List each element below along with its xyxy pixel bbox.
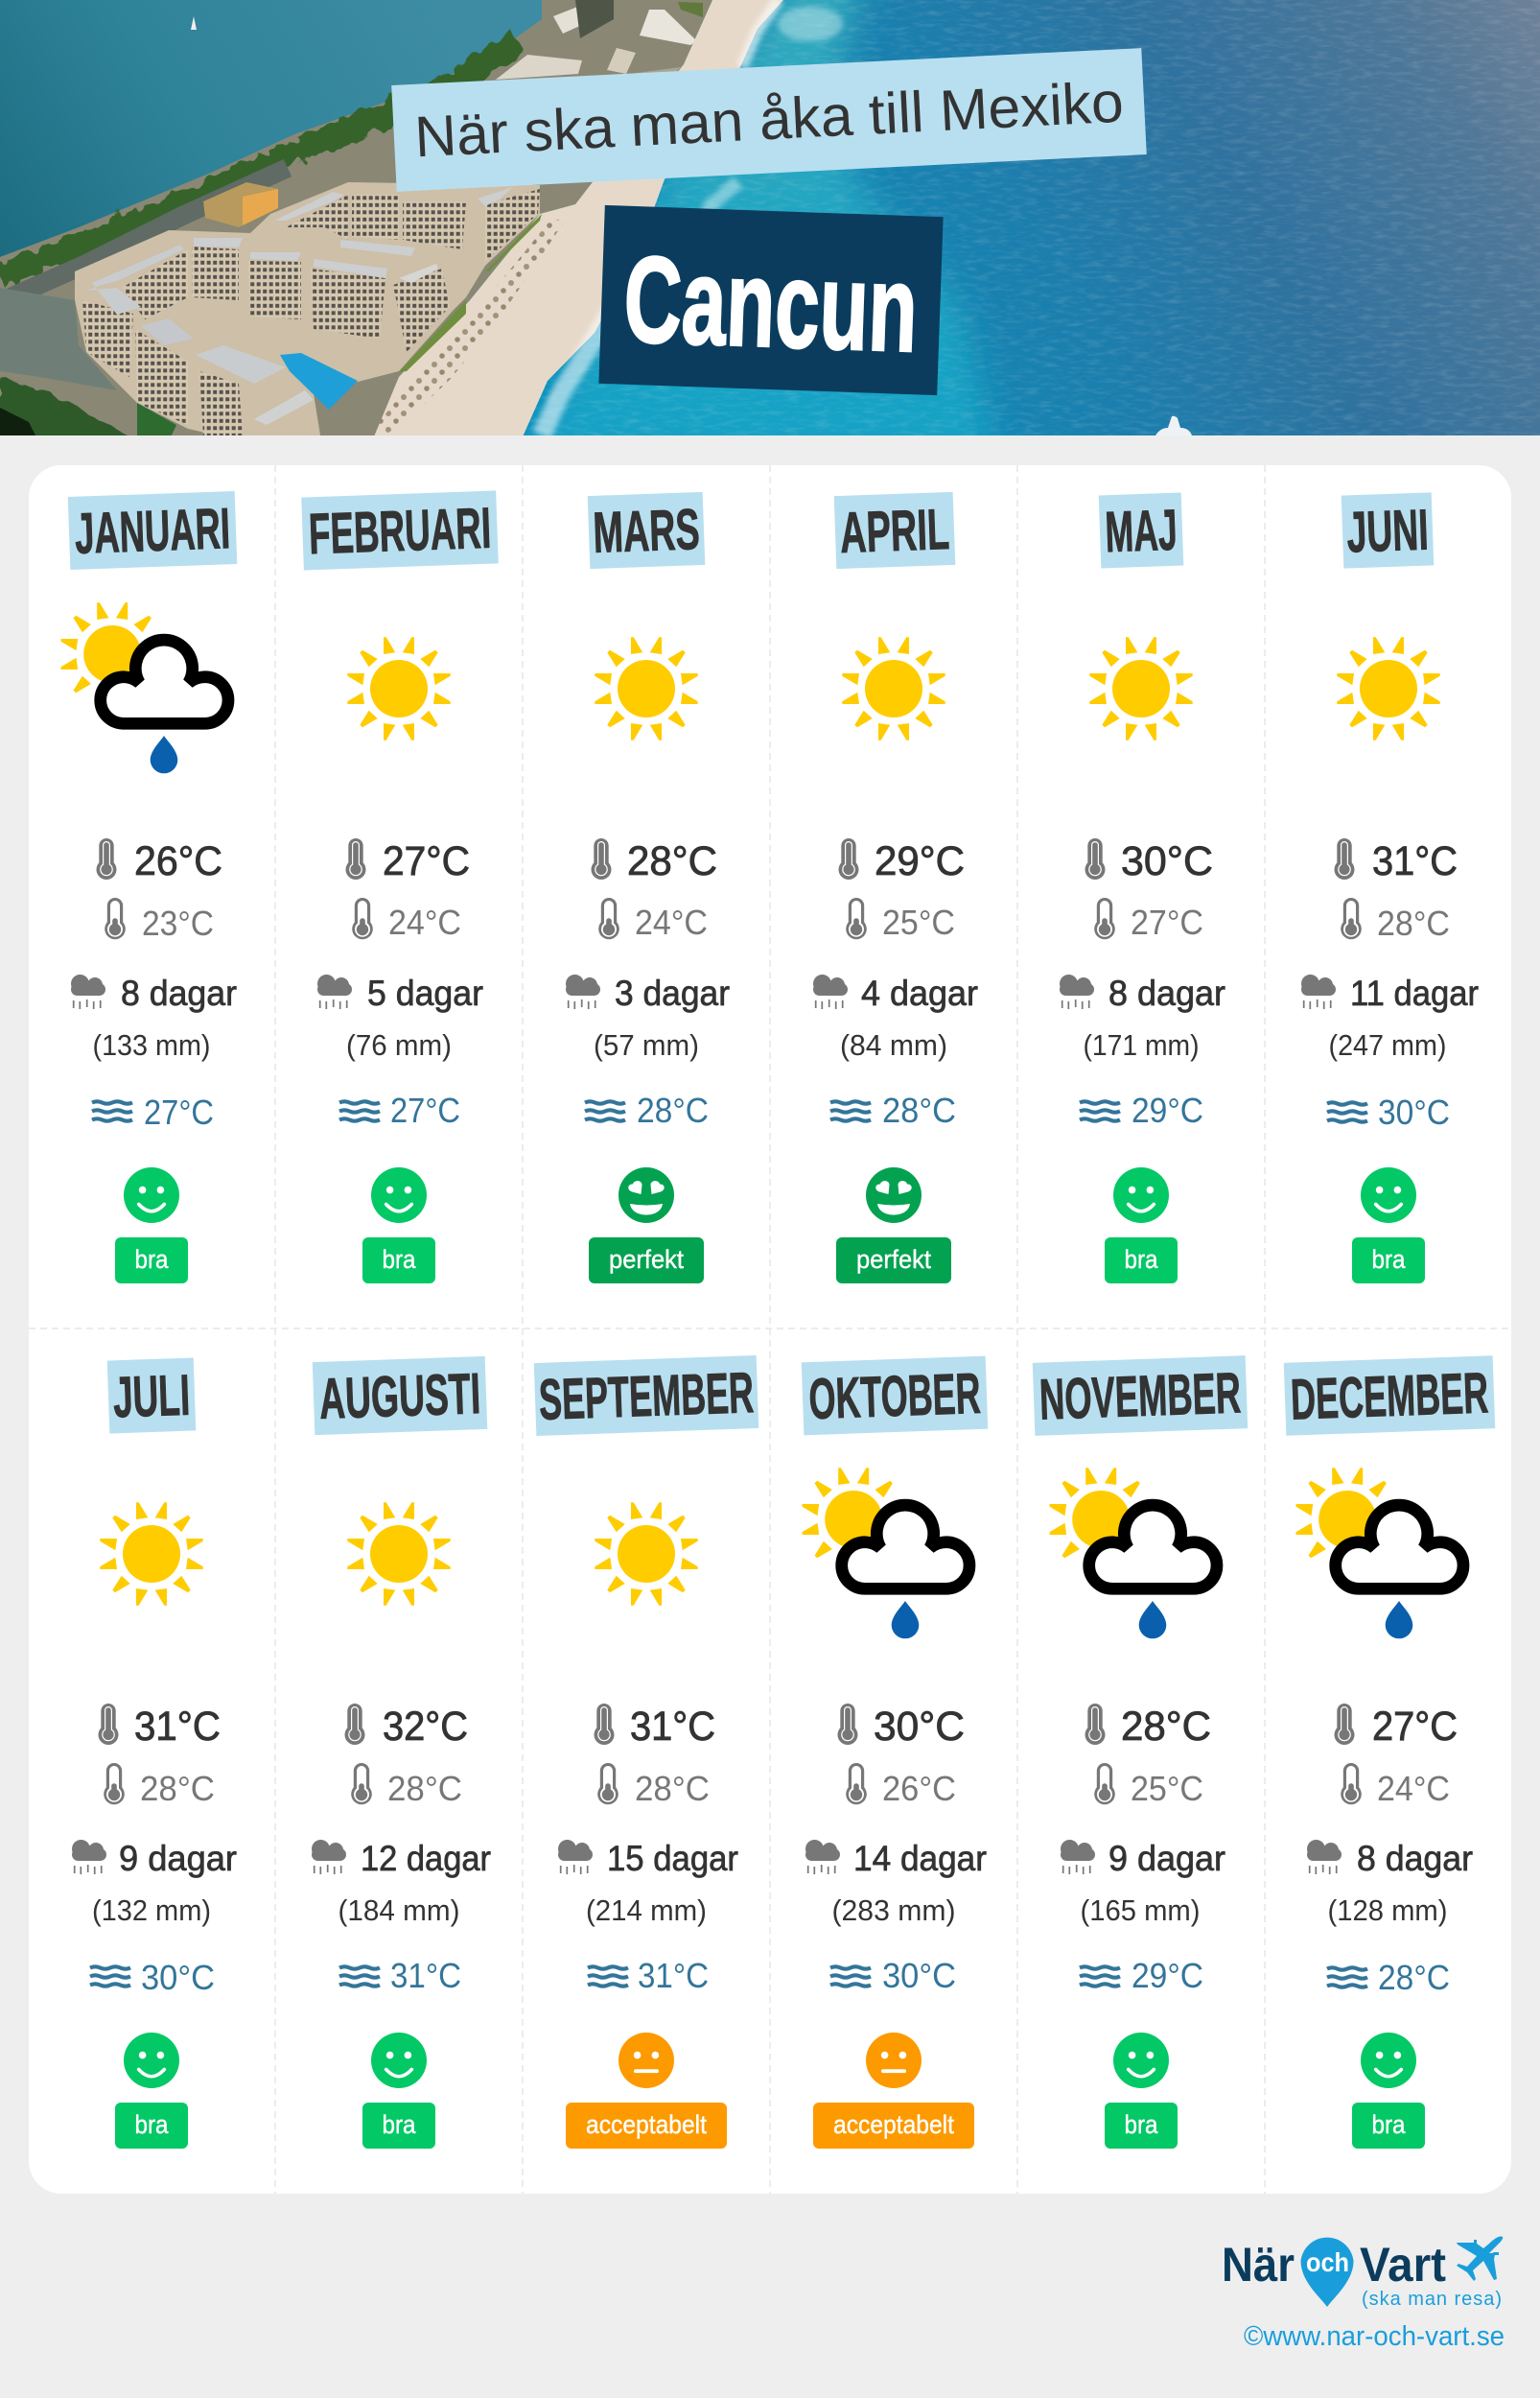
rain days [317, 974, 483, 1013]
rain days [1061, 1839, 1225, 1878]
icon: sun with rain cloud [802, 1468, 969, 1638]
rain days: 8 dagar [1108, 974, 1225, 1013]
high temperature: 30°C [1121, 838, 1213, 884]
high temperature [345, 1704, 468, 1750]
icon: map pin [1300, 2238, 1354, 2307]
rating: bra: bra [382, 2110, 416, 2139]
high temperature: 31°C [630, 1704, 715, 1750]
rating: bra: bra [1371, 1245, 1406, 1274]
rainfall: (171 mm) [1084, 1028, 1199, 1062]
rain days [71, 974, 237, 1013]
low temperature [1094, 1763, 1203, 1808]
heading: november: NOVEMBER [1038, 1360, 1242, 1432]
sea temperature [830, 1956, 956, 1995]
icon: sun [595, 637, 698, 741]
rating: bra [1352, 2033, 1425, 2149]
low temperature: 24°C [635, 903, 708, 942]
icon: sun with rain cloud [61, 602, 228, 773]
panel: juni [1301, 492, 1479, 1283]
rain days: 15 dagar [607, 1839, 738, 1878]
sea temperature [588, 1956, 709, 1995]
rating: bra [1105, 2033, 1178, 2149]
panel: november [1033, 1355, 1248, 2149]
heading: januari: JANUARI [74, 496, 231, 566]
icon: sun [842, 637, 945, 741]
rating: acceptabelt [813, 2033, 974, 2149]
logo: När och Vart: Vart [1360, 2238, 1446, 2292]
heading: april: APRIL [839, 497, 950, 565]
panel: januari [61, 491, 237, 1283]
sea temperature: 30°C [141, 1958, 215, 1997]
panel: februari [301, 490, 499, 1283]
heading: oktober: OKTOBER [807, 1361, 982, 1431]
icon: sun [1337, 637, 1440, 741]
rainfall: (184 mm) [338, 1893, 460, 1927]
heading: november [1033, 1355, 1248, 1436]
icon: sun with rain cloud [1049, 1468, 1217, 1638]
rating: bra [115, 1167, 188, 1283]
low temperature [846, 1763, 956, 1808]
sea temperature: 28°C [1378, 1958, 1450, 1997]
heading: oktober [802, 1356, 988, 1435]
heading: september [534, 1355, 758, 1436]
sea temperature [90, 1958, 215, 1997]
low temperature: 28°C [140, 1769, 215, 1808]
rain days [1307, 1839, 1473, 1878]
rain days [566, 974, 730, 1013]
rainfall: (165 mm) [1080, 1893, 1201, 1927]
panel: december [1284, 1355, 1495, 2149]
rain days: 3 dagar [615, 974, 730, 1013]
icon: sun with rain cloud [1296, 1468, 1463, 1638]
rating: bra: bra [1371, 2110, 1406, 2139]
low temperature: 23°C [142, 904, 214, 943]
rating: bra [115, 2033, 188, 2149]
rain days [1060, 974, 1225, 1013]
rainfall: (283 mm) [832, 1893, 955, 1927]
sea temperature [585, 1091, 709, 1130]
high temperature: 28°C [627, 838, 717, 884]
low temperature [846, 898, 955, 942]
low temperature: 24°C [1377, 1769, 1450, 1808]
website credit: ©www.nar-och-vart.se [1244, 2321, 1505, 2352]
heading: juni [1342, 492, 1434, 569]
low temperature: 28°C [1377, 904, 1450, 943]
heading: maj [1099, 493, 1183, 568]
rain days [312, 1839, 491, 1878]
rating: perfekt [836, 1167, 951, 1283]
rating: acceptabelt [566, 2033, 727, 2149]
panel: mars [566, 492, 730, 1283]
high temperature: 27°C [1372, 1704, 1458, 1750]
rating: bra: bra [1124, 2110, 1158, 2139]
sea temperature: 29°C [1132, 1956, 1203, 1995]
icon: sun [347, 1502, 451, 1606]
rainfall: (247 mm) [1329, 1028, 1446, 1062]
low temperature [1341, 898, 1450, 943]
low temperature [1341, 1763, 1450, 1808]
rating: bra [362, 2033, 435, 2149]
sea temperature [339, 1091, 460, 1130]
rain days: 14 dagar [853, 1839, 987, 1878]
sea temperature: 30°C [1378, 1093, 1450, 1132]
rating: bra: bra [134, 2110, 169, 2139]
rain days: 4 dagar [861, 974, 978, 1013]
rainfall: (57 mm) [594, 1028, 699, 1062]
heading: juli: JULI [112, 1363, 191, 1429]
rain days [1301, 974, 1479, 1013]
high temperature: 31°C [134, 1704, 221, 1750]
high temperature: 26°C [134, 838, 222, 884]
heading: juli [107, 1357, 196, 1434]
sea temperature [1080, 1956, 1203, 1995]
heading: september: SEPTEMBER [538, 1360, 755, 1432]
high temperature [595, 1704, 715, 1750]
logo: När och Vart [1222, 2236, 1503, 2310]
high temperature: 31°C [1372, 838, 1458, 884]
rain days [813, 974, 978, 1013]
icon: sun [347, 637, 451, 741]
rating: bra [1105, 1167, 1178, 1283]
rating: perfekt: perfekt [609, 1245, 684, 1274]
low temperature: 27°C [1131, 903, 1203, 942]
rain days [558, 1839, 738, 1878]
heading: februari: FEBRUARI [308, 496, 492, 566]
rating: bra: bra [382, 1245, 416, 1274]
rainfall: (214 mm) [586, 1893, 707, 1927]
high temperature: 27°C [383, 838, 470, 884]
rain days: 12 dagar [361, 1839, 491, 1878]
sea temperature [1080, 1091, 1203, 1130]
heading: maj: MAJ [1104, 498, 1178, 564]
logo: När och Vart: (ska man resa) [1362, 2289, 1502, 2310]
sea temperature [1327, 1958, 1450, 1997]
low temperature [105, 898, 214, 943]
low temperature [351, 1763, 462, 1808]
title banner: När ska man åka till Mexiko [413, 70, 1125, 169]
sea temperature: 27°C [144, 1093, 214, 1132]
destination banner: Cancun: Cancun [621, 231, 920, 378]
low temperature: 25°C [882, 903, 955, 942]
sea temperature [339, 1956, 461, 1995]
high temperature [1335, 838, 1458, 884]
heading: juni: JUNI [1345, 498, 1430, 564]
high temperature: 30°C [874, 1704, 965, 1750]
sea temperature [1327, 1093, 1450, 1132]
rain days: 11 dagar [1350, 974, 1479, 1013]
sea temperature: 28°C [882, 1091, 956, 1130]
rainfall: (76 mm) [346, 1028, 452, 1062]
high temperature: 32°C [383, 1704, 468, 1750]
panel: september [534, 1355, 758, 2149]
sea temperature: 30°C [882, 1956, 956, 1995]
high temperature [98, 1704, 221, 1750]
sea temperature: 27°C [390, 1091, 460, 1130]
rainfall: (128 mm) [1327, 1893, 1448, 1927]
sea temperature: 31°C [638, 1956, 709, 1995]
high temperature: 28°C [1121, 1704, 1211, 1750]
heading: augusti: AUGUSTI [318, 1361, 481, 1431]
panel: augusti [312, 1356, 491, 2149]
icon: airplane [1457, 2236, 1503, 2281]
heading: februari [301, 490, 499, 571]
low temperature: 28°C [387, 1769, 462, 1808]
rating: acceptabelt: acceptabelt [833, 2110, 954, 2139]
high temperature: 29°C [875, 838, 965, 884]
rating: perfekt: perfekt [856, 1245, 931, 1274]
panel: juli [72, 1357, 237, 2149]
rain days: 9 dagar [119, 1839, 237, 1878]
low temperature: 24°C [388, 903, 461, 942]
heading: mars: MARS [592, 497, 701, 565]
destination banner: Cancun [598, 205, 944, 395]
low temperature [597, 1763, 710, 1808]
low temperature: 28°C [635, 1769, 710, 1808]
low temperature [598, 898, 708, 942]
low temperature: 25°C [1131, 1769, 1203, 1808]
rainfall: (133 mm) [92, 1028, 211, 1062]
logo: När och Vart: och [1306, 2247, 1349, 2277]
rain days: 8 dagar [1357, 1839, 1473, 1878]
icon: sun [595, 1502, 698, 1606]
rating: bra [362, 1167, 435, 1283]
sea temperature [92, 1093, 214, 1132]
high temperature [96, 838, 222, 884]
title banner [391, 48, 1147, 192]
rating: acceptabelt: acceptabelt [586, 2110, 707, 2139]
rainfall: (84 mm) [840, 1028, 947, 1062]
rating: bra: bra [134, 1245, 169, 1274]
panel: oktober [802, 1356, 988, 2149]
high temperature [1335, 1704, 1458, 1750]
rating: perfekt [589, 1167, 704, 1283]
sea temperature: 29°C [1132, 1091, 1203, 1130]
heading: mars [588, 492, 705, 569]
rating: bra: bra [1124, 1245, 1158, 1274]
panel: april [813, 492, 978, 1283]
heading: januari [68, 491, 237, 570]
rain days: 5 dagar [367, 974, 483, 1013]
low temperature: 26°C [882, 1769, 956, 1808]
rain days: 9 dagar [1108, 1839, 1225, 1878]
heading: april [834, 492, 955, 569]
sea temperature: 28°C [637, 1091, 709, 1130]
panel: monthly climate table [29, 465, 1511, 2194]
sea temperature: 31°C [390, 1956, 461, 1995]
sea temperature [830, 1091, 956, 1130]
logo: När och Vart: När [1222, 2238, 1295, 2292]
low temperature [104, 1763, 215, 1808]
rain days: 8 dagar [121, 974, 237, 1013]
low temperature [1094, 898, 1203, 942]
high temperature [345, 838, 470, 884]
rainfall: (132 mm) [92, 1893, 211, 1927]
panel: maj [1060, 493, 1225, 1283]
hero photo: aerial view of Cancun hotels, beach and sea [0, 0, 1540, 460]
rating: bra [1352, 1167, 1425, 1283]
icon: sun [100, 1502, 203, 1606]
heading: augusti [313, 1356, 487, 1435]
icon: sun [1089, 637, 1193, 741]
low temperature [352, 898, 461, 942]
